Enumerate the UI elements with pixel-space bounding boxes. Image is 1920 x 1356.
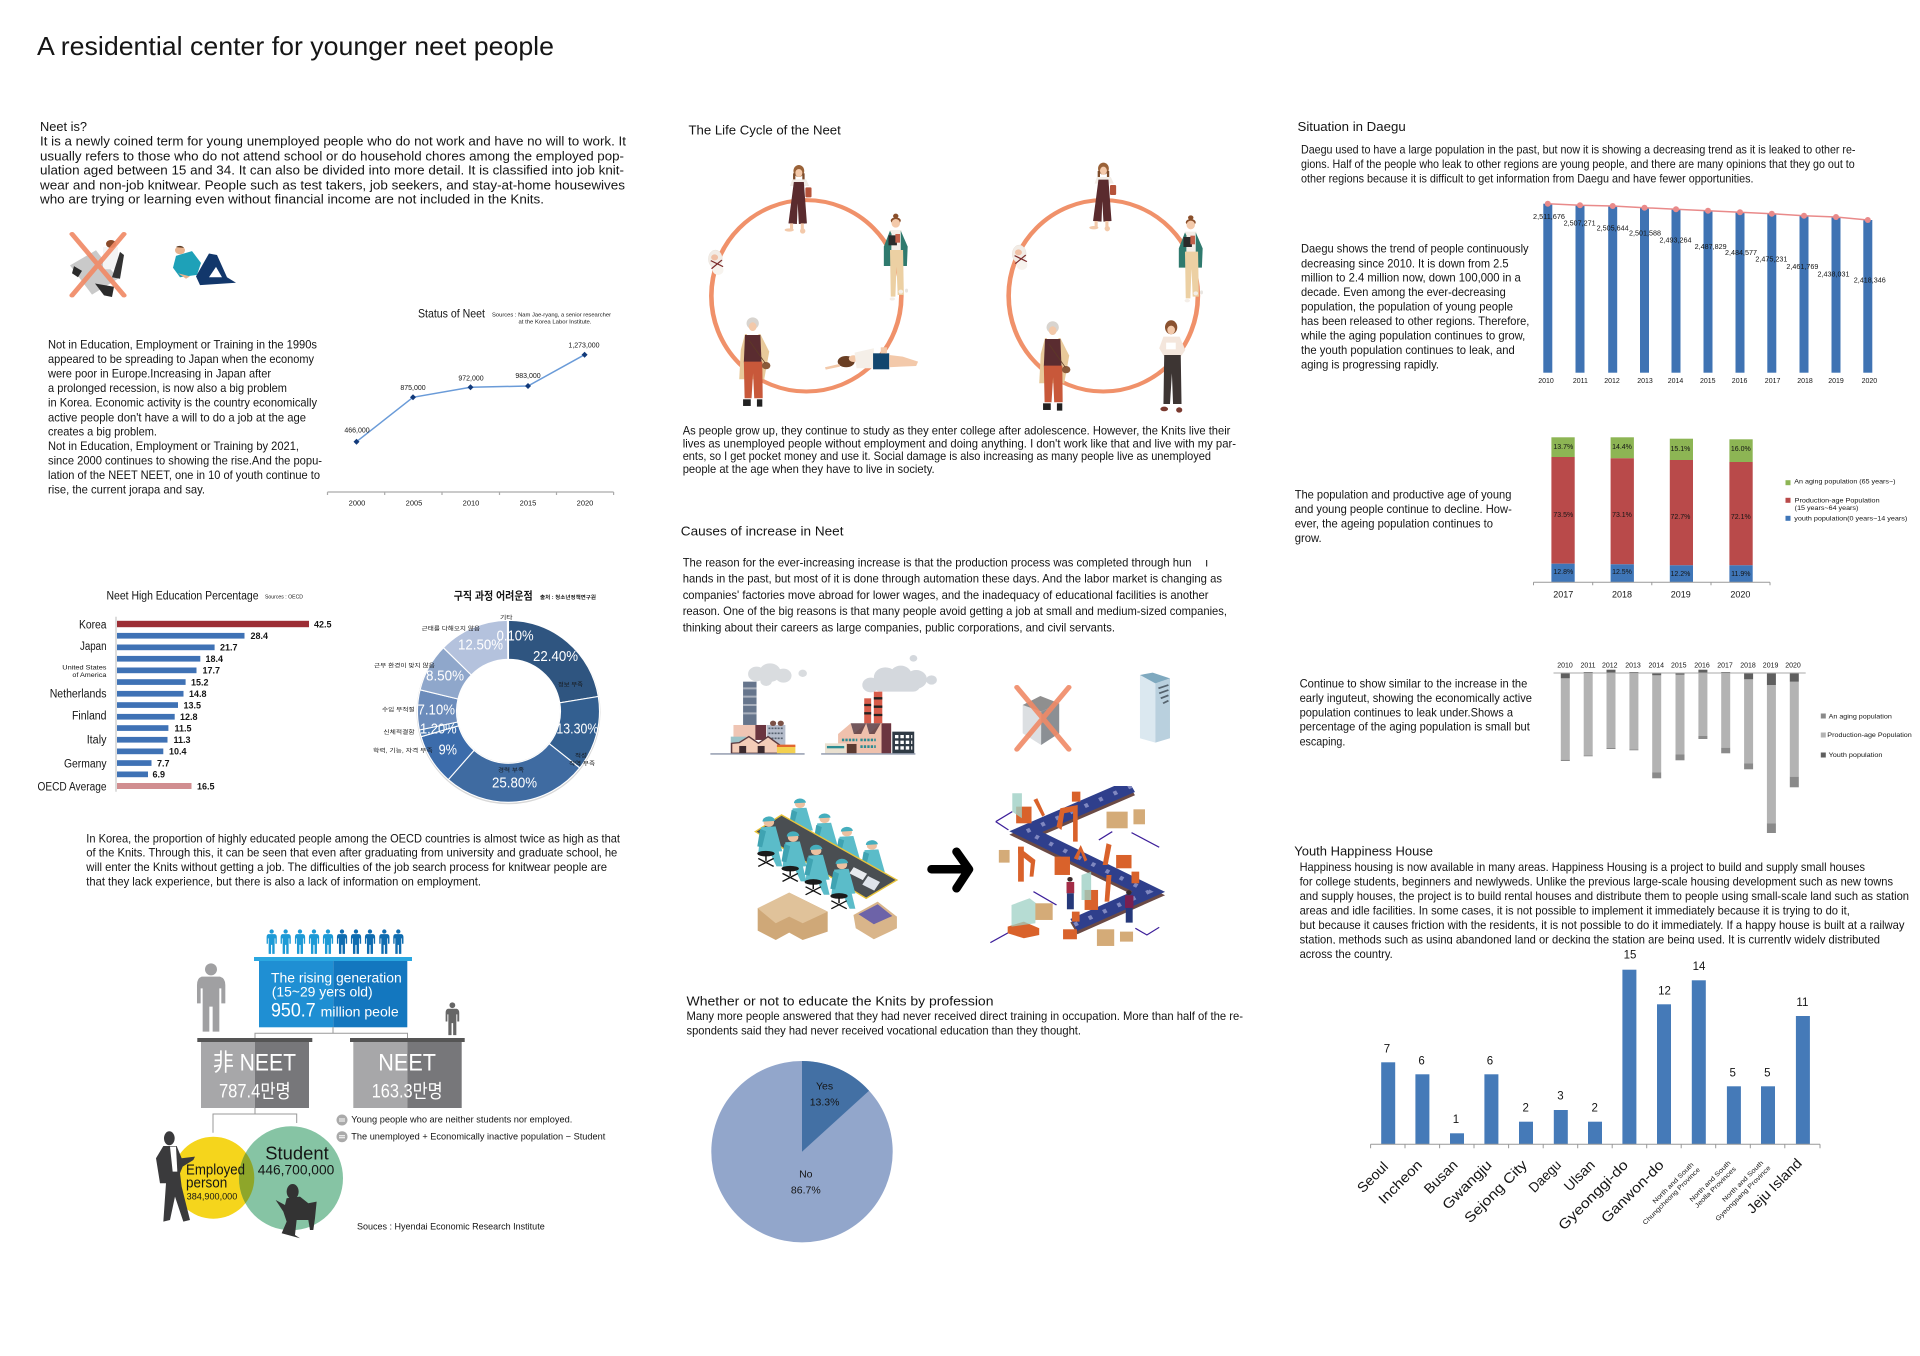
legend: stacked bars: An aging population (65 years~) [1794,479,1896,486]
chart: daegu population bars and line: 2,501,588 [1629,230,1661,237]
chart: happiness housing by region: 5 [1729,1067,1736,1079]
chart: pie chart: Yes [816,1080,833,1092]
chart: population outflow bars: 2019 [1763,662,1778,669]
chart: horizontal bar chart: 7.7 [157,758,170,768]
chart: horizontal bar chart: Finland [72,711,106,723]
icon: row of ten people [267,929,403,954]
chart: horizontal bar chart: 11.3 [174,735,191,745]
heading: donut chart [454,588,596,602]
chart: stacked population bars: 11.9% [1731,571,1750,578]
text block: population leak: percentage of the aging population is small but [1300,720,1530,734]
chart: population outflow bars: 2018 [1740,662,1756,669]
chart: stacked population bars: 2020 [1730,590,1750,600]
text block: neet history: Not in Education, Employment or Training by 2021, [48,439,299,453]
text block: life cycle description: As people grow up, they continue to study as they enter college after adolescence. However, the Knits live their [683,423,1230,437]
venn diagram: employed and student: Student [265,1143,329,1163]
chart: happiness housing by region: 2 [1522,1103,1529,1115]
chart: happiness housing by region: Ulsan [1560,1157,1598,1194]
text block: vocational education description: spondents said they had never received vocational education than they thought. [686,1023,1081,1037]
venn diagram: employed and student: person [186,1175,227,1191]
source note: Souces : Hyendai Economic Research Institute [357,1221,545,1231]
text block: daegu overview [1301,142,1856,185]
chart: population outflow bars: 2017 [1717,662,1733,669]
chart: stacked population bars [1534,437,1770,600]
text block: daegu overview: other regions because it is difficult to get information from Daegu and have fewer opportunities. [1301,171,1754,185]
heading: education chart: Sources : OECD [265,595,303,601]
icon: crossed out small building [1017,687,1069,749]
chart: population outflow bars: 2012 [1602,662,1618,669]
chart: population outflow bars: 2010 [1557,662,1573,669]
text block: neet definition: ulation aged between 15 and 34. It can also be divided into more detail. It is classified into job knit- [40,164,624,178]
chart: status of neet line chart: 2015 [520,498,536,507]
panel: vocational education [686,994,1243,1242]
chart: happiness housing by region: 11 [1796,997,1808,1009]
text block: productive age: grow. [1295,531,1322,545]
chart: daegu population bars and line: 2,475,231 [1755,257,1787,264]
text block: neet definition: wear and non-job knitwear. People such as test takers, job seekers, and stay-at-home housewives [39,178,625,192]
chart: daegu population bars and line: 2,511,676 [1533,214,1565,221]
text block: daegu trend: population, the population of young people [1301,300,1513,314]
legend: neet definition [336,1114,606,1142]
text block: causes description [683,556,1227,634]
chart: happiness housing by region: Ganwon-do [1598,1156,1667,1226]
chart: horizontal bar chart: 21.7 [220,643,238,653]
text block: life cycle description [683,423,1236,476]
chart: happiness housing by region: 1 [1453,1114,1459,1126]
chart: daegu population bars and line: 2,484,577 [1725,250,1757,257]
heading: donut chart: 출처 : 청소년정책연구원 [540,594,596,601]
chart: donut chart: 0.10% [497,628,534,645]
text block: korea education: will enter the Knits without getting a job. The difficulties of the job search process for knitwear people are [85,860,607,874]
chart: happiness housing by region: North and South [1652,1161,1696,1205]
chart: horizontal bar chart: Italy [87,734,107,746]
text block: daegu trend: aging is progressing rapidly. [1301,358,1439,372]
chart: donut chart: 22.40% [533,648,578,665]
chart: happiness housing by region: Daegu [1525,1157,1564,1195]
chart: stacked population bars: 72.7% [1670,514,1690,521]
chart: daegu population bars and line: 2,461,769 [1786,264,1818,271]
chart: population outflow bars: 2014 [1649,662,1664,669]
chart: daegu population bars and line: 2016 [1732,378,1747,385]
chart: pie chart [711,1061,893,1242]
text block: daegu overview: gions. Half of the people who leak to other regions are young people, and there are many opinions that they go out to [1301,157,1855,171]
text block: neet history: active people don't have a will to do a job at the age [48,410,306,424]
icon: person lying down [173,246,236,285]
chart: happiness housing by region: Gwangju [1439,1157,1495,1212]
panel: neet definition [39,120,627,507]
chart: donut chart: 수입 부적절 [382,705,415,713]
heading: donut chart: 구직 과정 어려운점 [454,588,533,602]
chart: status of neet line chart: Sources : Nam Jae-ryang, a senior researcher [492,313,611,319]
legend: stacked bars: Production-age Population [1795,497,1880,504]
chart: donut chart: 9% [439,741,457,758]
text block: happiness housing: station, methods such as using abandoned land or decking the station are being used. It is currently widely distributed [1300,932,1880,946]
chart: daegu population bars and line: 2017 [1765,378,1780,385]
chart: donut chart: 신체적결함 [383,728,415,736]
legend: outflow bars: An aging population [1829,713,1892,720]
text block: life cycle description: lives as unemployed people without employment and doing anything. I don't work like that and live with my par- [683,436,1236,450]
text block: happiness housing: Happiness housing is now available in many areas. Happiness Housing is a project to build and supply small houses [1300,860,1865,874]
icon: tall office tower [1140,673,1170,743]
text block: population leak: escaping. [1300,734,1345,748]
illustration: automated robot production line [990,786,1159,946]
chart: horizontal bar chart: Korea [79,619,107,631]
chart: donut chart: 근태를 다해오지 않음 [422,625,480,633]
text block: population leak: population continues to leak under.Shows a [1300,705,1513,719]
chart: status of neet line chart: 2000 [349,498,365,507]
text block: happiness housing: areas and idle facilities. In some cases, it is not possible to implement it immediately because it is trying to do it, [1300,904,1850,918]
icon: gray standing person [197,963,225,1032]
text block: neet history: rise, the current jorapa and say. [48,483,205,497]
box: non neet: 787.4만명 [219,1080,291,1102]
chart: stacked population bars: 12.5% [1612,569,1632,576]
legend: neet definition: Young people who are neither students nor employed. [351,1115,572,1125]
text block: daegu trend: the youth population continues to leak, and [1301,343,1515,357]
diagram: left life cycle with neet [708,165,918,407]
legend: outflow bars: Youth population [1829,752,1883,759]
chart: happiness housing by region: Gyeonggi-do [1555,1156,1631,1233]
text block: korea education [85,831,621,889]
chart: happiness housing by region: Chungcheong Province [1642,1166,1702,1227]
chart: daegu population bars and line: 2019 [1828,378,1844,385]
chart: status of neet line chart: 466,000 [344,428,370,435]
chart: population outflow bars [1554,662,1806,833]
box: rising generation: million peole [321,1004,399,1020]
venn diagram: employed and student: 446,700,000 [258,1161,335,1177]
chart: status of neet line chart: 972,000 [458,376,484,383]
chart: donut chart: 경력 부족 [498,766,524,774]
chart: happiness housing by region: Sejong City [1461,1157,1530,1226]
chart: horizontal bar chart: United States [62,664,107,671]
text block: daegu trend: million to 2.4 million now, down 100,000 in a [1301,271,1521,285]
chart: daegu population bars and line: 2,493,264 [1660,238,1692,245]
text block: productive age: The population and productive age of young [1295,487,1511,501]
chart: stacked population bars: 2019 [1671,590,1691,600]
chart: happiness housing by region: North and South [1689,1159,1733,1204]
chart: population outflow bars: 2016 [1694,662,1710,669]
text block: vocational education description [686,1009,1243,1037]
legend: stacked bars [1786,479,1907,523]
chart: horizontal bar chart: Japan [80,641,106,653]
chart: status of neet line chart: 2020 [577,498,593,507]
chart: happiness housing by region: 5 [1764,1067,1771,1079]
chart: happiness housing by region [1354,949,1820,1233]
heading: youth happiness house: Youth Happiness House [1294,843,1433,858]
text block: neet history: lation of the NEET NEET, one in 10 of youth continue to [48,468,320,482]
chart: stacked population bars: 12.2% [1670,571,1690,578]
legend: neet definition: The unemployed + Economically inactive population − Student [351,1131,606,1141]
panel: neet high education percentage [38,590,332,793]
text block: daegu trend: has been released to other regions. Therefore, [1301,314,1529,328]
chart: horizontal bar chart: OECD Average [38,781,106,793]
text block: neet definition: who are trying or learning even without financial income are not included in the Knits. [39,193,544,207]
text block: daegu trend: while the aging population continues to grow, [1300,329,1525,343]
chart: donut chart: 7.10% [418,701,455,718]
icon: businessman silhouette [156,1131,195,1222]
text block: neet history: appeared to be spreading to Japan when the economy [48,352,314,366]
text block: population leak: early inguteut, showing the economically active [1300,691,1532,705]
text block: productive age: ever, the ageing population continues to [1295,516,1493,530]
chart: happiness housing by region: 2 [1591,1103,1598,1115]
chart: status of neet line chart: 2010 [463,498,479,507]
chart: daegu population bars and line: 2,418,346 [1854,278,1886,285]
chart: donut chart: 학력, 기능, 자격 부족 [373,747,433,755]
text block: korea education: of the Knits. Through this, it can be seen that even after graduating from university and graduate school, he [86,846,618,860]
icon: small dark person [446,1002,459,1035]
chart: happiness housing by region: 14 [1693,961,1706,973]
chart: horizontal bar chart: 12.8 [180,712,198,722]
chart: stacked population bars: 2018 [1612,590,1632,600]
chart: horizontal bar chart: 10.4 [169,747,187,757]
icon: seated student silhouette [276,1184,317,1238]
chart: daegu population bars and line: 2018 [1797,378,1813,385]
legend: stacked bars: (15 years~64 years) [1795,505,1858,512]
panel: life cycle [683,123,1236,476]
panel: youth happiness house [1294,843,1909,1233]
text block: korea education: In Korea, the proportion of highly educated people among the OECD countries is almost twice as high as that [86,831,621,845]
chart: pie chart: No [799,1168,813,1180]
text block: neet history: Not in Education, Employment or Training in the 1990s [48,337,317,351]
chart: stacked population bars: 12.8% [1553,569,1573,576]
text block: neet history: a prolonged recession, is now also a big problem [48,381,287,395]
chart: donut chart: 직역 부족 [569,760,595,768]
legend: outflow bars: Production-age Population [1827,732,1912,739]
text block: causes description: companies' factories move abroad for lower wages, and the inadequacy of educational facilities is another [683,588,1209,602]
chart: horizontal bar chart: Netherlands [50,688,107,700]
text block: neet definition [39,135,627,207]
chart: population outflow bars: 2013 [1625,662,1641,669]
box: rising generation [254,957,412,1027]
panel: causes of increase [681,523,1227,946]
text block: life cycle description: people at the age when they have to live in society. [683,462,935,476]
text block: neet history: creates a big problem. [48,425,157,439]
heading: daegu: Situation in Daegu [1298,119,1406,134]
chart: donut chart: 13.30% [556,720,598,737]
chart: daegu population bars and line: 2011 [1573,378,1588,385]
text block: productive age: and young people continue to decline. How- [1295,502,1512,516]
text block: neet definition: It is a newly coined term for young unemployed people who do not work and have no will to work. It [40,135,627,149]
text block: korea education: that they lack experience, but there is also a lack of information on employment. [86,875,481,889]
panel: rising generation infographic [156,929,606,1238]
chart: daegu population bars and line: 2,487,829 [1695,244,1727,251]
box: neet: 163.3만명 [372,1080,443,1102]
text block: happiness housing [1299,860,1909,961]
box: neet [350,1038,465,1108]
text block: population leak [1300,676,1532,748]
chart: daegu population bars and line: 2,505,644 [1597,226,1629,233]
venn diagram: employed and student [172,1126,343,1230]
text block: happiness housing: across the country. [1300,947,1393,961]
chart: daegu population bars and line [1533,201,1886,385]
box: non neet [197,1038,312,1108]
chart: happiness housing by region: Gyeongsang Province [1714,1164,1773,1223]
chart: happiness housing by region: 12 [1658,985,1671,997]
chart: donut chart [373,613,600,804]
chart: donut chart: 적성 [575,751,587,759]
text block: population leak: Continue to show similar to the increase in the [1300,676,1528,690]
chart: stacked population bars: 13.7% [1553,444,1573,451]
text block: neet history: since 2000 continues to showing the rise.And the popu- [48,454,322,468]
chart: pie chart: 86.7% [791,1184,821,1196]
chart: stacked population bars: 14.4% [1612,444,1632,451]
chart: status of neet line chart: 983,000 [515,373,541,380]
chart: donut chart: 근무 환경이 맞지 않음 [374,662,435,670]
chart: donut chart: 1.20% [420,720,457,737]
diagram: right life cycle with employment [1009,163,1203,413]
text block: daegu trend: Daegu shows the trend of people continuously [1301,242,1529,256]
chart: stacked population bars: 73.5% [1553,512,1573,519]
chart: population outflow bars: 2011 [1580,662,1596,669]
chart: horizontal bar chart: 28.4 [250,631,268,641]
chart: daegu population bars and line: 2012 [1604,378,1620,385]
chart: happiness housing by region: 3 [1557,1091,1564,1103]
chart: horizontal bar chart: 16.5 [197,781,215,791]
chart: status of neet line chart: 1,273,000 [568,343,600,350]
text block: causes description: thinking about their careers as large companies, public corporations, and civil servants. [683,620,1115,634]
text block: causes description: hands in the past, but most of it is done through automation these days. And the labor market is changing as [683,572,1222,586]
chart: donut chart: 25.80% [492,774,537,791]
chart: daegu population bars and line: 2,438,031 [1818,271,1850,278]
chart: happiness housing by region: Jeolla Provinces [1694,1165,1738,1210]
chart: stacked population bars: 2017 [1553,590,1573,600]
chart: horizontal bar chart [38,617,332,793]
text block: causes description: The reason for the ever-increasing increase is that the production process was completed through hun [683,556,1192,570]
chart: daegu population bars and line: 2010 [1538,378,1554,385]
chart: horizontal bar chart: 15.2 [191,677,209,687]
heading: neet is: Neet is? [40,120,87,134]
chart: daegu population bars and line: 2020 [1862,378,1877,385]
chart: happiness housing by region: Incheon [1375,1157,1425,1207]
chart: horizontal bar chart: 11.5 [174,723,192,733]
panel: job search difficulties donut [373,588,600,804]
venn diagram: employed and student: Employed [186,1162,245,1178]
heading: education chart: Neet High Education Percentage [106,590,258,602]
text block: causes description: ı [1205,556,1208,570]
icon: factory with two chimneys [821,655,937,754]
chart: pie chart: 13.3% [810,1096,839,1108]
chart: happiness housing by region: 7 [1384,1043,1390,1055]
illustration: manual assembly line workers [755,799,897,940]
chart: status of neet line chart: at the Korea Labor Institute. [518,319,592,325]
chart: happiness housing by region: Jeju Island [1743,1155,1805,1217]
chart: population outflow bars: 2020 [1785,662,1801,669]
chart: status of neet line chart: 875,000 [400,385,426,392]
chart: happiness housing by region: 6 [1487,1055,1493,1067]
text block: productive age [1295,487,1512,545]
chart: happiness housing by region: 15 [1624,949,1636,961]
venn diagram: employed and student: 384,900,000 [187,1191,237,1201]
text block: daegu overview: Daegu used to have a large population in the past, but now it is showing a decreasing trend as it is leaked to other re- [1301,142,1856,156]
text block: daegu trend: decreasing since 2010. It is down from 2.5 [1301,256,1509,270]
box: non neet: 非 NEET [213,1050,296,1077]
chart: donut chart: 정보 부족 [558,681,583,688]
chart: stacked population bars: 72.1% [1731,514,1751,521]
icon: crossed out office worker [70,234,124,297]
chart: daegu population bars and line: 2015 [1700,378,1716,385]
chart: happiness housing by region: Seoul [1354,1158,1391,1196]
box: rising generation: (15~29 yers old) [272,984,373,1000]
text block: neet history: in Korea. Economic activity is the country economically [48,396,317,410]
chart: status of neet line chart: 2005 [406,498,422,507]
text block: daegu trend [1300,242,1529,372]
chart: status of neet line chart: Status of Neet [418,307,486,321]
text block: neet history: were poor in Europe.Increasing in Japan after [47,367,271,381]
legend: outflow bars [1821,713,1912,759]
chart: happiness housing by region: Busan [1420,1157,1461,1197]
heading: life cycle: The Life Cycle of the Neet [688,123,841,137]
chart: happiness housing by region: North and South [1721,1159,1765,1204]
chart: horizontal bar chart: 42.5 [314,619,332,629]
chart: horizontal bar chart: 14.8 [189,689,207,699]
chart: population outflow bars: 2015 [1671,662,1687,669]
heading: causes: Causes of increase in Neet [681,523,844,538]
text block: vocational education description: Many more people answered that they had never received direct training in occupation. More than half of the re- [686,1009,1243,1023]
text block: neet history [47,337,322,497]
box: neet: NEET [378,1050,436,1077]
title: A residential center for younger neet people [37,31,554,61]
text block: life cycle description: ents, so I get pocket money and use it. Social damage is also increasing as many people live as unemployed [683,449,1211,463]
heading: vocational education: Whether or not to educate the Knits by profession [686,994,994,1009]
chart: horizontal bar chart: Germany [64,759,107,771]
arrow: automation transition [932,852,969,888]
chart: donut chart: 12.50% [458,637,503,654]
chart: donut chart: 기타 [500,613,513,621]
box: rising generation: The rising generation [271,970,402,986]
text block: causes description: reason. One of the big reasons is that many people avoid getting a job at small and medium-sized companies, [683,604,1227,618]
text block: neet definition: usually refers to those who do not attend school or do household chores among the employed pop- [40,149,624,163]
chart: stacked population bars: 15.1% [1670,446,1690,453]
chart: stacked population bars: 16.0% [1731,446,1751,453]
chart: donut chart: 8.50% [426,668,464,685]
chart: horizontal bar chart: of America [72,672,107,679]
chart: happiness housing by region: 6 [1418,1055,1425,1067]
box: rising generation: 950.7 [271,1001,316,1022]
chart: horizontal bar chart: 6.9 [152,770,165,780]
chart: daegu population bars and line: 2,507,271 [1564,220,1596,227]
chart: horizontal bar chart: 13.5 [184,700,201,710]
panel: situation in daegu [1295,119,1912,833]
chart: daegu population bars and line: 2014 [1668,378,1683,385]
chart: stacked population bars: 73.1% [1612,512,1632,519]
legend: stacked bars: youth population(0 years~14 years) [1794,516,1907,523]
icon: factory with one chimney [710,663,807,754]
chart: horizontal bar chart: 17.7 [202,666,220,676]
chart: daegu population bars and line: 2013 [1637,378,1653,385]
text block: daegu trend: decade. Even among the ever-decreasing [1301,285,1506,299]
chart: status of neet line chart [328,307,614,507]
chart: horizontal bar chart: 18.4 [206,654,223,664]
